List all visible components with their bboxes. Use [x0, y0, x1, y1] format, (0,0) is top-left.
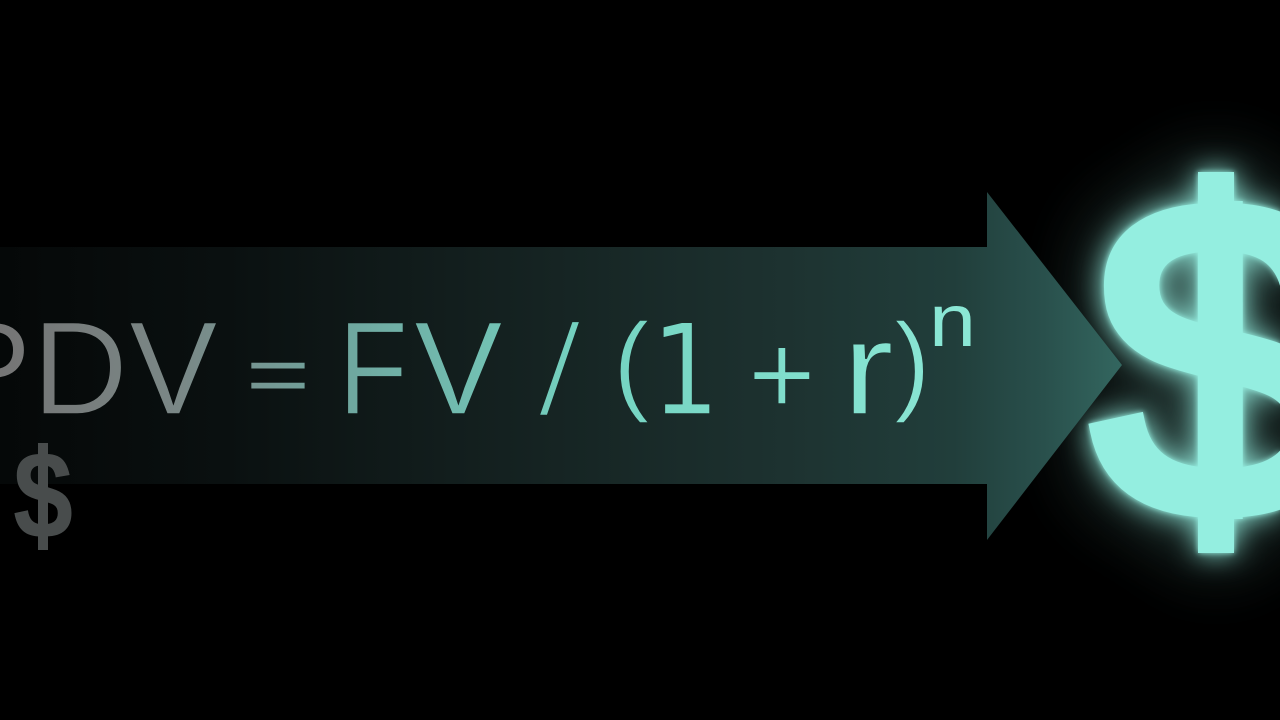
formula: PDV = FV / (1 + r)^n: ) — [894, 301, 931, 424]
formula: PDV = FV / (1 + r)^n: 1 — [651, 297, 720, 444]
arrow — [0, 192, 1122, 540]
formula: PDV = FV / (1 + r)^n: n — [929, 279, 976, 362]
formula: PDV = FV / (1 + r)^n: D — [32, 295, 128, 443]
infographic canvas — [0, 135, 1280, 588]
formula: PDV = FV / (1 + r)^n: + — [748, 309, 816, 439]
formula: PDV = FV / (1 + r)^n: ( — [613, 301, 650, 424]
formula: PDV = FV / (1 + r)^n: / — [536, 297, 583, 445]
formula: PDV = FV / (1 + r)^n: = — [246, 330, 310, 419]
formula: PDV = FV / (1 + r)^n: V — [129, 295, 218, 443]
formula: PDV = FV / (1 + r)^n: V — [414, 295, 503, 443]
formula: PDV = FV / (1 + r)^n — [0, 279, 976, 445]
formula: PDV = FV / (1 + r)^n: r — [842, 295, 894, 443]
small faded dollar sign: $ — [13, 427, 73, 565]
formula: PDV = FV / (1 + r)^n: F — [338, 295, 408, 443]
